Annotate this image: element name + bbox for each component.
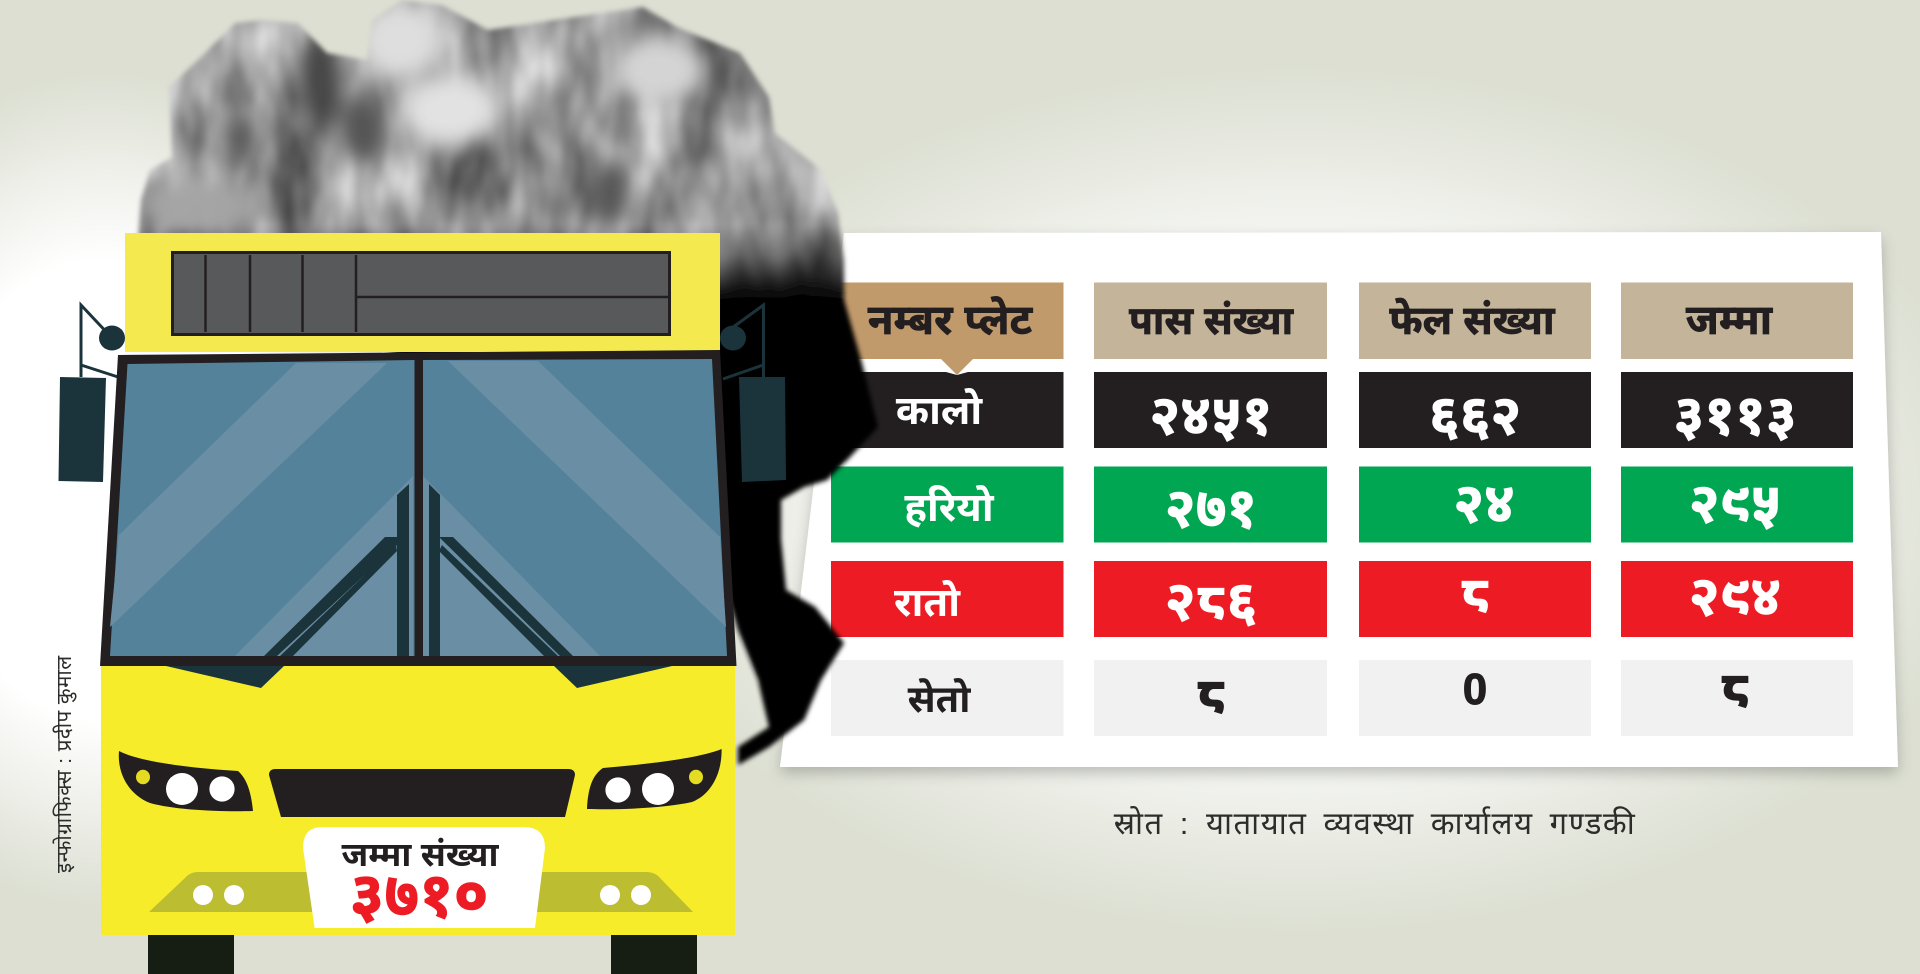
red plate row: रातो bbox=[894, 580, 961, 625]
red plate row: २८६ bbox=[1165, 570, 1257, 632]
plate label: जम्मा संख्या bbox=[342, 836, 499, 874]
table cells bbox=[831, 282, 1853, 736]
credit: vertical text: इन्फोग्राफिक्स : प्रदीप कुमाल bbox=[52, 655, 77, 873]
row: black plate cells bbox=[831, 372, 1853, 448]
number plate bbox=[303, 827, 545, 930]
left mirror bbox=[58, 305, 125, 482]
right headlight bbox=[587, 749, 722, 809]
header labels: फेल संख्या bbox=[1389, 298, 1556, 343]
panel: data table card bbox=[780, 232, 1898, 767]
red plate row: २९४ bbox=[1689, 565, 1781, 627]
red plate row bbox=[894, 563, 1781, 632]
header: fail count cell bbox=[1359, 282, 1591, 359]
header labels: पास संख्या bbox=[1129, 300, 1295, 343]
white plate row: ८ bbox=[1720, 658, 1750, 720]
roof panel bbox=[125, 233, 720, 352]
black plate row: ६६२ bbox=[1429, 384, 1521, 446]
plate total: ३७१० bbox=[350, 861, 488, 930]
white plate row bbox=[908, 658, 1750, 726]
wheels bbox=[148, 935, 697, 974]
right fog lamp bbox=[530, 872, 693, 912]
row: red plate cells bbox=[831, 561, 1853, 637]
destination display bbox=[172, 252, 670, 334]
green plate row: २७१ bbox=[1165, 477, 1257, 539]
left headlight bbox=[119, 751, 253, 811]
black plate row: कालो bbox=[896, 388, 983, 433]
glass reflections bbox=[110, 361, 726, 656]
red plate row: ८ bbox=[1460, 563, 1490, 625]
windshield frame bbox=[100, 350, 736, 666]
under-windshield wedges bbox=[166, 666, 672, 688]
body bbox=[101, 666, 735, 935]
green plate row: २४ bbox=[1453, 472, 1515, 534]
wipers bbox=[264, 484, 573, 656]
left fog lamp bbox=[149, 872, 320, 912]
header: pass count cell bbox=[1094, 282, 1327, 359]
white plate row: सेतो bbox=[908, 677, 971, 721]
green plate row bbox=[904, 472, 1781, 539]
green plate row: हरियो bbox=[904, 485, 995, 530]
smoke shading bbox=[140, 0, 706, 231]
row: green plate cells bbox=[831, 466, 1853, 542]
smoke cloud bbox=[120, 0, 900, 782]
black plate row: २४५१ bbox=[1149, 384, 1273, 446]
right mirror bbox=[720, 305, 786, 482]
row: white plate cells bbox=[831, 660, 1853, 736]
bus bbox=[58, 233, 786, 974]
header labels: नम्बर प्लेट bbox=[868, 296, 1034, 343]
white plate row: ८ bbox=[1196, 664, 1226, 726]
table text bbox=[868, 296, 1797, 726]
header labels bbox=[868, 296, 1773, 343]
white plate row: 0 bbox=[1463, 665, 1487, 714]
header labels: जम्मा bbox=[1686, 296, 1773, 343]
source note: स्रोत : यातायात व्यवस्था कार्यालय गण्डकी bbox=[1114, 806, 1636, 841]
grille bbox=[269, 769, 575, 817]
header: total cell bbox=[1621, 282, 1853, 359]
black plate row bbox=[896, 384, 1797, 446]
header: number plate cell bbox=[831, 282, 1064, 375]
green plate row: २९५ bbox=[1689, 472, 1781, 534]
windshield glass bbox=[110, 359, 727, 656]
black plate row: ३११३ bbox=[1673, 384, 1797, 446]
